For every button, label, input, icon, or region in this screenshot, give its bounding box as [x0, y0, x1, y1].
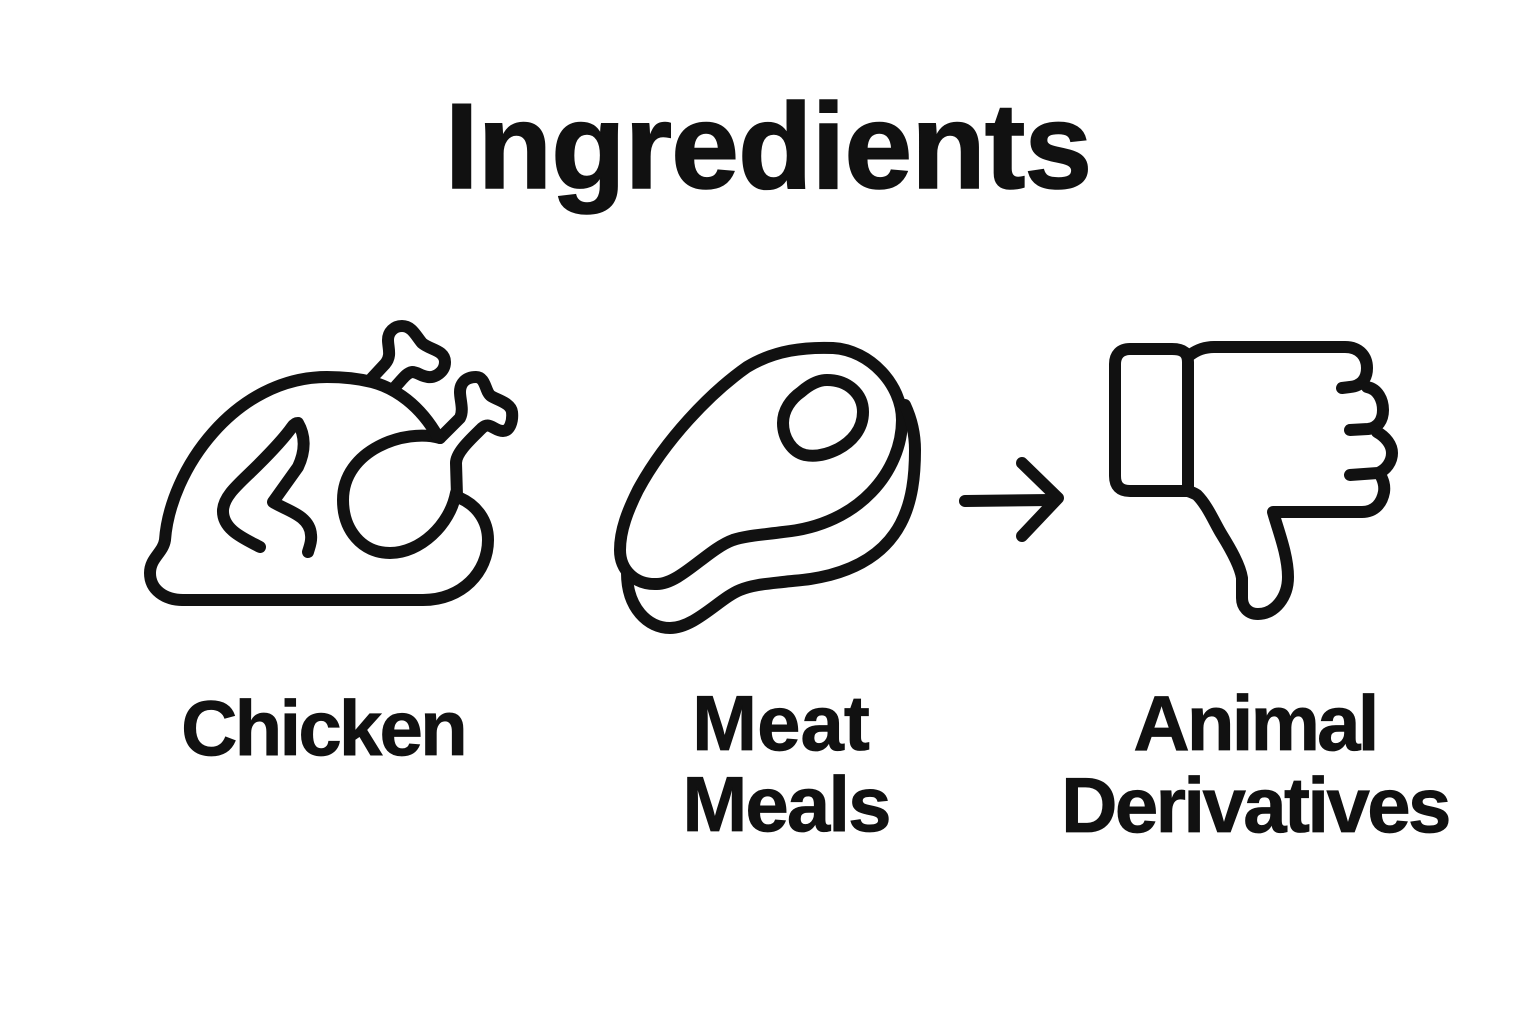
label: meat meals: Meals: [682, 760, 890, 848]
label: animal derivatives: Derivatives: [1061, 761, 1449, 849]
label: meat meals: [682, 679, 890, 848]
label: animal derivatives: [1061, 679, 1449, 849]
title: Ingredients: [445, 78, 1091, 214]
arrow: [965, 463, 1058, 536]
label: animal derivatives: Animal: [1133, 679, 1377, 767]
icon: thumbs down: [1115, 347, 1392, 614]
label: chicken: Chicken: [181, 684, 465, 772]
label: meat meals: Meat: [692, 679, 870, 767]
icon: roast chicken: [150, 326, 512, 600]
icon: steak: [620, 348, 915, 628]
